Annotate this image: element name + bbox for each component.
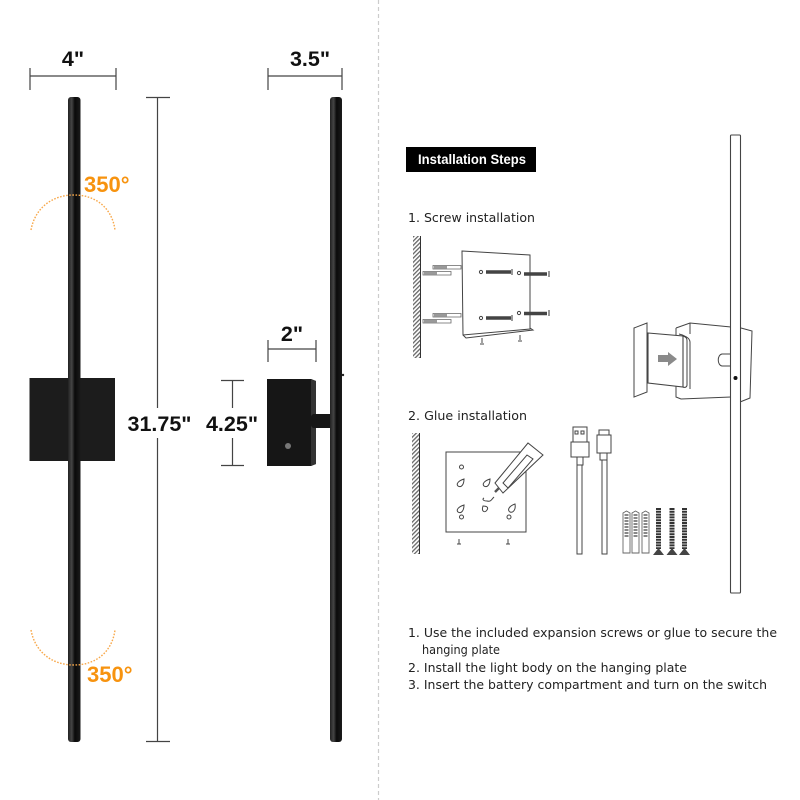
heading: Installation Steps [406,147,536,172]
top rotation arc and label: 350° [84,172,130,197]
anchors and screws set [623,508,690,555]
usb-c cable [597,430,611,554]
dimension: box height 4.25 in: 4.25" [206,412,258,436]
dimension: depth 3.5 in: 3.5" [290,47,330,71]
wall [412,433,419,554]
dimension: width 4 in [30,47,116,90]
bottom screws [457,539,510,544]
insert arrow [658,352,677,366]
battery door [634,323,647,397]
wall anchors [423,266,461,323]
dimension: height 31.75 in [128,98,192,742]
installation instructions: 3. Insert the battery compartment and turn on the switch [408,677,767,692]
dimension: box depth 2 in [268,322,316,362]
screw installation diagram [413,236,549,358]
vertical light bar [730,135,740,593]
dimension: box depth 2 in: 2" [281,322,303,346]
heading: Installation Steps: Installation Steps [418,152,526,167]
holes and glue drops [457,465,515,519]
light bar front [68,97,80,742]
dimension: depth 3.5 in [268,47,342,90]
connector arm [311,414,333,428]
top rotation arc and label [31,172,130,230]
light bar side [330,97,342,742]
installation instructions [408,625,777,692]
wall [413,236,420,358]
installation instructions: 2. Install the light body on the hanging plate [408,660,687,675]
step label: glue installation: 2. Glue installation [408,408,527,423]
usb cable [571,427,589,554]
switch dot [734,376,738,380]
installation instructions: 1. Use the included expansion screws or glue to secure the [408,625,777,640]
hanging plate [462,251,530,335]
mounting box [676,323,752,402]
battery box side [267,379,316,466]
screws [486,272,547,318]
step label: screw installation: 1. Screw installation [408,210,535,225]
bottom rotation arc and label: 350° [87,662,133,687]
bottom rotation arc and label [31,630,133,687]
plate holes [479,270,483,274]
glue tube [495,443,543,493]
side view wall light [267,97,344,742]
dimension: box height 4.25 in [206,380,258,466]
assembled light with battery compartment [634,135,752,593]
glue installation diagram [412,433,543,554]
installation instructions: hanging plate [422,642,500,657]
dimension: width 4 in: 4" [62,47,84,71]
front view wall light [30,97,115,742]
battery box front [30,378,115,461]
dimension: height 31.75 in: 31.75" [128,412,192,436]
plate [446,452,526,532]
small bottom screws [480,335,522,344]
switch button [285,443,291,449]
arm stub [718,354,731,366]
